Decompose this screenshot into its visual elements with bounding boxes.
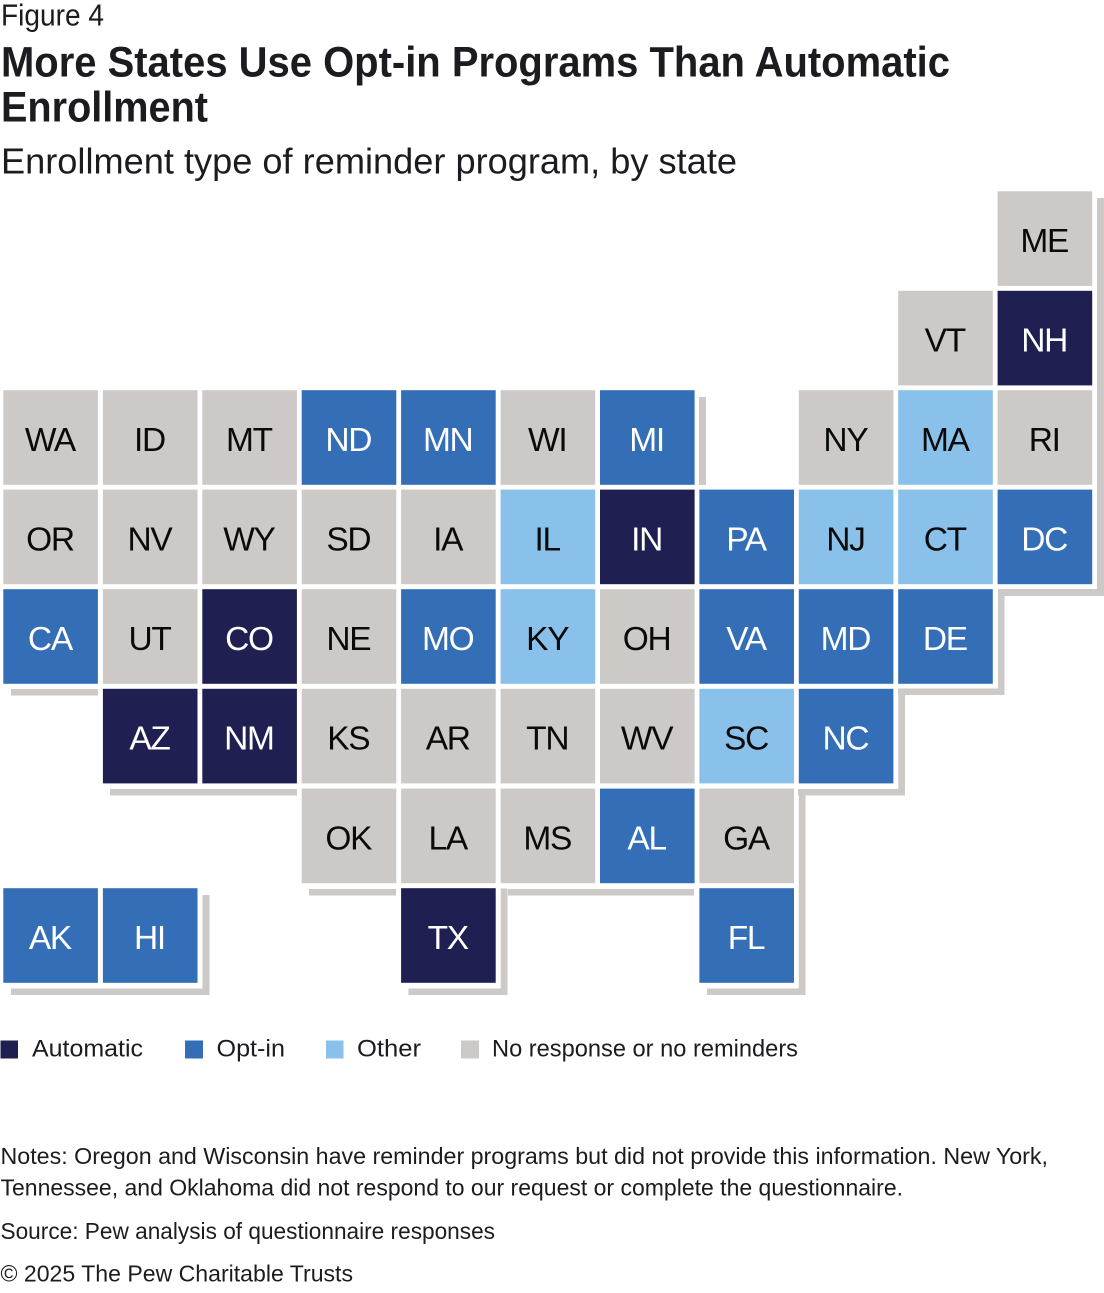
tile: WI [501,390,595,485]
tile: AZ [103,689,198,783]
tile: MO: MO [422,621,474,658]
tile: MS: MS [523,820,571,857]
tile: WA: WA [25,422,77,459]
tile: GA [699,789,794,883]
title: Enrollment [1,84,208,132]
copyright: © 2025 The Pew Charitable Trusts [0,1261,353,1287]
source: Source: Pew analysis of questionnaire responses [0,1218,495,1244]
tile: SD [302,490,396,584]
tile: DE [898,589,993,684]
tile: ND: ND [325,422,371,459]
legend item: Opt-in: Opt-in [216,1036,285,1063]
tile: HI: HI [134,920,165,957]
tile: ID [103,390,198,485]
tile: IA [401,490,496,584]
tile: NC [799,689,893,783]
map drop shadow [11,198,1104,995]
tile: CT: CT [924,521,967,558]
legend item: Automatic: Automatic [32,1036,143,1063]
tile: OH: OH [623,621,670,658]
tile: NE: NE [326,621,370,658]
tile: NE [302,589,396,684]
tile: AK: AK [29,920,72,957]
tile: AL [600,789,695,883]
tile: MD [799,589,893,684]
tile: SC [699,689,794,783]
tile: IA: IA [433,521,464,558]
tile: NY: NY [823,422,868,459]
tile: MO [401,589,496,684]
tile: ME [998,191,1092,286]
tile: NY [799,390,893,485]
tile: TX: TX [428,920,469,957]
tile: MI [600,390,695,485]
tile: AR [401,689,496,783]
tile: MA: MA [921,422,971,459]
tile: NC: NC [823,720,868,757]
tile: MD: MD [821,621,870,658]
tile: AL: AL [627,820,666,857]
tile: IL [501,490,595,584]
tile: LA: LA [429,820,469,857]
tile: CO [202,589,297,684]
notes: Notes: Oregon and Wisconsin have reminder programs but did not provide this information. New York, [0,1143,1048,1169]
tile: UT: UT [128,621,171,658]
tile: VT: VT [925,322,966,359]
tile: PA [699,490,794,584]
tile: CT [898,490,993,584]
tile: DC [998,490,1092,584]
tile: ID: ID [134,422,165,459]
tile: NM: NM [224,720,274,757]
tile: FL [699,888,794,983]
tile: VT [898,291,993,385]
tile: SC: SC [724,720,768,757]
tile: NM [202,689,297,783]
tile: AK [3,888,98,983]
tile: NJ [799,490,893,584]
tile: KS [302,689,396,783]
tile: NJ: NJ [826,521,865,558]
tile: WV [600,689,695,783]
tile: WA [3,390,98,485]
title [1,39,950,132]
tile: ND [302,390,396,485]
tile: TX [401,888,496,983]
tile: PA: PA [726,521,768,558]
notes: Tennessee, and Oklahoma did not respond to our request or complete the questionnaire. [0,1175,903,1201]
tile: VA [699,589,794,684]
tile: NH: NH [1021,322,1067,359]
tile: MI: MI [629,422,664,459]
tile: NH [998,291,1092,385]
tile: OK [302,789,396,883]
tile: OR [3,490,98,584]
legend item: Other [326,1036,421,1063]
tile: MS [501,789,595,883]
tile: NV [103,490,198,584]
legend item: Opt-in [185,1036,285,1063]
legend item: No response or no reminders: No response or no reminders [492,1036,798,1063]
subtitle: Enrollment type of reminder program, by state [1,141,737,182]
tile: MT [202,390,297,485]
legend [0,1036,798,1063]
tile: MN [401,390,496,485]
tile: TN: TN [526,720,568,757]
tile: DE: DE [923,621,967,658]
tile: ME: ME [1020,223,1068,260]
tile: RI [998,390,1092,485]
tile: WI: WI [528,422,566,459]
tile: WV: WV [621,720,674,757]
tile: KS: KS [327,720,369,757]
tile: UT [103,589,198,684]
legend item: Other: Other [357,1036,421,1063]
tile: AZ: AZ [129,720,170,757]
tile: OR: OR [26,521,74,558]
tile: TN [501,689,595,783]
tile: NV: NV [128,521,173,558]
tile: VA: VA [726,621,768,658]
tile: MT: MT [226,422,273,459]
tile: CA: CA [28,621,74,658]
tile: FL: FL [728,920,765,957]
tile: GA: GA [723,820,771,857]
tile map of states [3,191,1092,983]
tile: OH [600,589,695,684]
tile: CO: CO [225,621,273,658]
tile: WY [202,490,297,584]
tile: MA [898,390,993,485]
tile: IN [600,490,695,584]
tile: IL: IL [535,521,561,558]
tile: HI [103,888,198,983]
tile: RI: RI [1029,422,1060,459]
tile: SD: SD [326,521,370,558]
tile: DC: DC [1021,521,1067,558]
tile: CA [3,589,98,684]
tile: KY: KY [526,621,569,658]
title: More States Use Opt-in Programs Than Automatic [1,39,950,87]
tile: IN: IN [631,521,662,558]
tile: WY: WY [223,521,276,558]
tile: OK: OK [325,820,372,857]
tile: LA [401,789,496,883]
notes [0,1143,1048,1201]
tile: MN: MN [423,422,472,459]
tile: AR: AR [426,720,470,757]
tile: KY [501,589,595,684]
